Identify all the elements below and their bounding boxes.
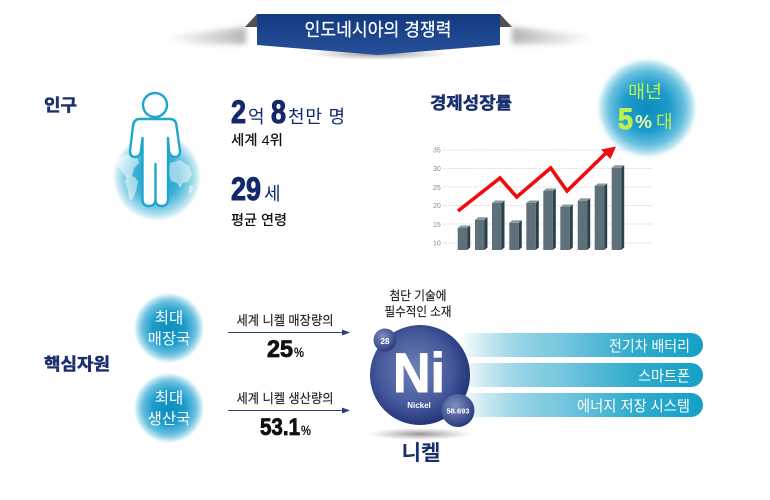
title banner: 인도네시아의 경쟁력 [304,20,452,40]
stat: population count: 2 [231,94,246,130]
stat: population count: 억 [248,107,265,127]
arrow: rising trend line [458,146,616,211]
stat: median age: 29 [231,171,261,207]
stat: production share: 53.1 [260,414,300,441]
callout: 5% annual growth: % [635,112,652,132]
application bars [460,333,703,417]
heading: key resources: 핵심자원 [44,355,110,374]
callout: 5% annual growth [595,56,699,160]
stat: production share: % [301,422,311,438]
label: nickel: 니켈 [402,442,440,465]
stat: population count: 8 [271,94,286,130]
callout: 5% annual growth: 매년 [628,82,662,102]
stat: median age: 평균 연령 [231,212,287,228]
icon: nickel element sphere: 58.693 [447,406,469,416]
badge: largest reserves: 최대 [155,309,183,327]
badge: largest producer: 생산국 [148,410,190,428]
stat: reserves share: % [294,344,304,360]
bar: energy storage [460,393,703,417]
badge: largest reserves: 매장국 [148,330,190,348]
stat: population count: 세계 4위 [231,132,283,148]
bar: EV battery: 전기차 배터리 [609,338,690,355]
icon: nickel element sphere: 28 [381,337,390,346]
stat: reserves share: 25 [267,336,293,363]
text: essential material caption: 필수적인 소재 [384,305,452,319]
text: essential material caption: 첨단 기술에 [390,289,446,303]
bar chart: economic growth: 25 [433,185,441,192]
bar chart: economic growth [433,148,653,250]
title banner [160,14,600,60]
icon: nickel element sphere: Nickel [407,401,431,410]
stat: production share: 세계 니켈 생산량의 [236,391,334,406]
stat: median age: 세 [264,184,281,204]
callout: 5% annual growth: 대 [656,112,673,132]
badge: largest producer: 최대 [155,389,183,407]
icon: nickel element sphere [368,325,474,440]
stat: median age [231,171,287,228]
bar chart: economic growth: 30 [433,166,441,173]
stat: population count: 천만 명 [288,107,345,127]
stat: production share [228,391,350,441]
bar: smartphone [460,363,703,387]
badge: largest producer [132,372,206,444]
stat: reserves share: 세계 니켈 매장량의 [236,313,334,328]
icon: nickel element sphere: Ni [393,341,445,404]
stat: population count [231,94,345,148]
text: essential material caption [384,289,452,319]
bar chart: economic growth: 20 [433,203,441,210]
icon: person on globe [112,93,202,222]
callout: 5% annual growth: 5 [618,103,633,136]
bar chart: economic growth: 10 [433,240,441,248]
badge: largest reserves [132,292,206,364]
bar chart: economic growth: 15 [433,222,441,229]
heading: economic growth: 경제성장률 [430,94,512,113]
bar: smartphone: 스마트폰 [638,368,690,385]
heading: population: 인구 [44,96,77,115]
bar: energy storage: 에너지 저장 시스템 [577,398,690,415]
stat: reserves share [228,313,350,363]
bar: EV battery [460,333,703,357]
bar chart: economic growth: 35 [433,148,441,154]
